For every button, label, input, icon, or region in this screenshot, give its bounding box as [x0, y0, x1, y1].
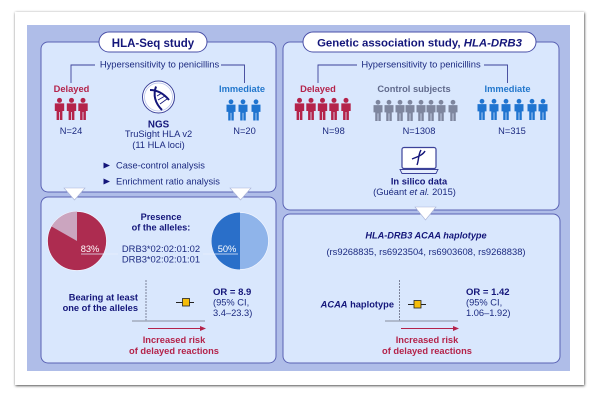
analyses list: Case-control analysis	[116, 160, 205, 170]
alleles text: of the alleles:	[132, 222, 190, 232]
delayed group: Delayed	[54, 84, 90, 94]
panel: alleles results	[41, 188, 276, 363]
risk arrow left: of delayed reactions	[129, 346, 219, 356]
risk arrow left	[129, 326, 219, 356]
NGS text: NGS	[148, 120, 170, 130]
immediate group: N=20	[233, 126, 256, 136]
panel: HLA-Seq study	[41, 32, 276, 192]
in silico text: In silico data	[391, 176, 448, 186]
triangle connector	[415, 207, 436, 220]
heading: genetic association: Genetic association study, HLA-DRB3	[317, 38, 523, 50]
pie chart 83%: 83%	[81, 244, 99, 254]
NGS text: TruSight HLA v2	[125, 129, 192, 139]
heading: HLA-Seq study: HLA-Seq study	[112, 38, 195, 50]
panel: Genetic association study	[283, 32, 559, 210]
in silico text: (Guéant et al. 2015)	[373, 187, 456, 197]
forest plot left: (95% CI,	[213, 298, 249, 308]
heading: HLA-Seq study	[99, 32, 207, 52]
triangle connector right	[230, 188, 251, 200]
control subjects group: N=1308	[403, 126, 435, 136]
delayed group: N=24	[60, 126, 82, 136]
in silico text	[373, 176, 456, 197]
delayed group: Delayed	[300, 84, 336, 94]
heading: genetic association	[303, 32, 536, 52]
analyses list: Enrichment ratio analysis	[116, 176, 220, 186]
risk arrow right: Increased risk	[396, 335, 459, 345]
bracket: hypersensitivity	[71, 58, 244, 83]
blue background	[27, 25, 570, 371]
bracket: hypersensitivity: Hypersensitivity to penicillins	[100, 58, 219, 70]
control subjects group	[374, 84, 457, 136]
alleles text: DRB3*02:02:01:02	[122, 243, 200, 254]
alleles text: DRB3*02:02:01:01	[122, 254, 200, 264]
risk arrow left: Increased risk	[143, 335, 206, 345]
pie chart 50%: 50%	[218, 244, 236, 254]
bracket: hypersensitivity	[318, 58, 508, 83]
haplotype heading: HLA-DRB3 ACAA haplotype	[365, 230, 487, 240]
forest plot left: OR = 8.9	[213, 287, 251, 298]
NGS text: (11 HLA loci)	[132, 140, 185, 150]
icon: laptop DNA	[400, 148, 438, 174]
immediate group: Immediate	[484, 84, 530, 94]
forest plot right: ACAA haplotype	[320, 300, 394, 310]
delayed group	[54, 84, 90, 136]
haplotype heading: (rs9268835, rs6923504, rs6903608, rs9268838)	[326, 246, 526, 257]
triangle connector left	[64, 188, 85, 200]
immediate group	[478, 84, 547, 136]
pie chart 83%	[48, 212, 118, 270]
forest plot right: 1.06–1.92)	[466, 308, 510, 318]
forest plot left	[63, 280, 252, 321]
immediate group: N=315	[498, 126, 526, 136]
analyses list	[104, 160, 220, 186]
panel: haplotype results	[283, 207, 560, 363]
forest plot right	[320, 280, 510, 321]
pie chart 50%	[203, 212, 268, 270]
forest plot left: one of the alleles	[63, 303, 138, 313]
delayed group: N=98	[322, 126, 345, 136]
forest plot right: (95% CI,	[466, 298, 502, 308]
immediate group	[219, 84, 265, 136]
bracket: hypersensitivity: Hypersensitivity to penicillins	[361, 58, 481, 70]
immediate group: Immediate	[219, 84, 265, 94]
alleles text: Presence	[141, 212, 181, 222]
forest plot right: OR = 1.42	[466, 287, 510, 298]
risk arrow right: of delayed reactions	[382, 346, 472, 356]
control subjects group: Control subjects	[377, 84, 451, 94]
icon: DNA circle	[142, 81, 174, 113]
alleles text	[122, 212, 200, 264]
delayed group	[295, 84, 351, 136]
forest plot left: 3.4–23.3)	[213, 308, 252, 318]
forest plot left: Bearing at least	[69, 292, 138, 302]
haplotype heading	[326, 230, 526, 257]
NGS text	[125, 120, 192, 150]
risk arrow right	[382, 326, 472, 356]
